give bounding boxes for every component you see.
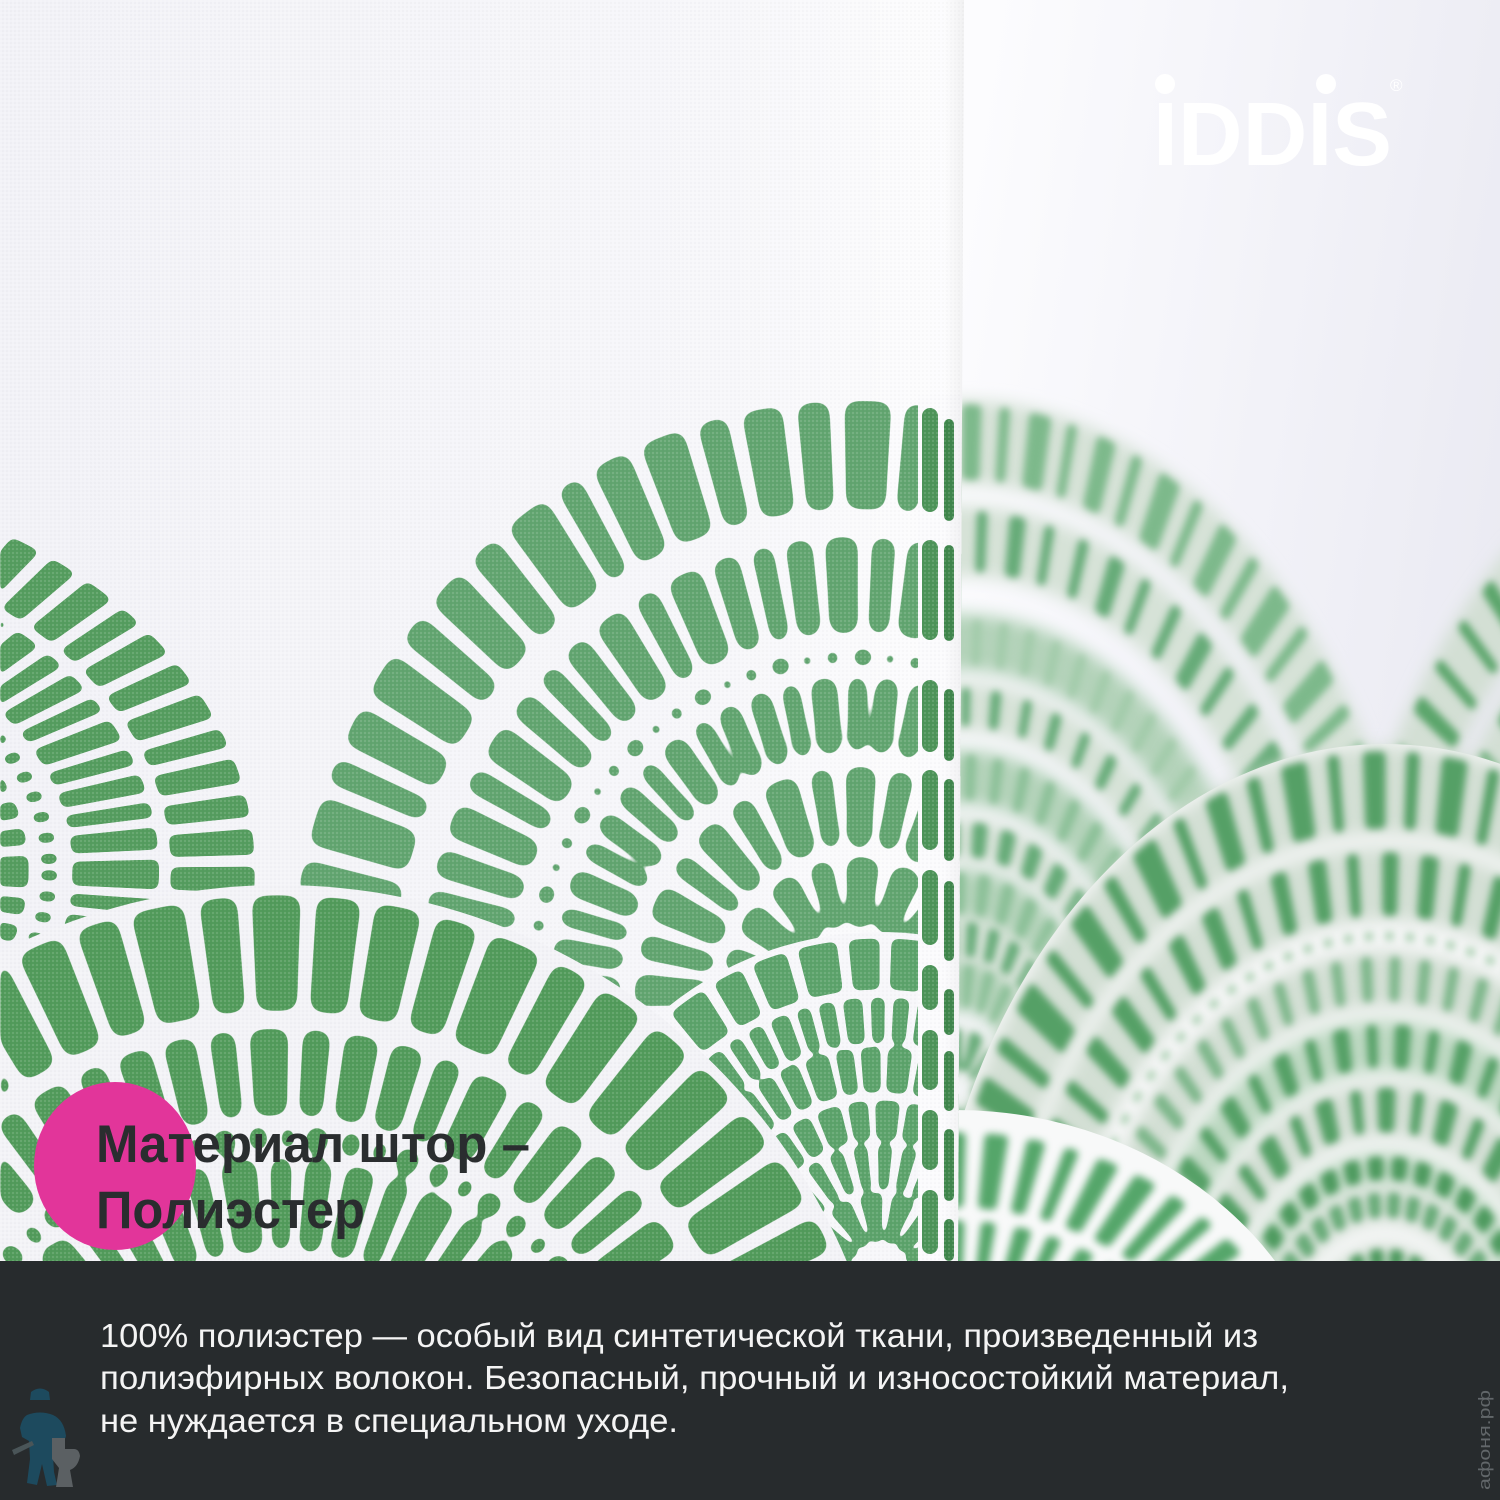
logo: IDDIS: IDDIS [1153,85,1392,185]
fan: lower left pattern [0,885,847,1261]
title: Полиэстер [96,1181,365,1240]
fan: blurred top right pattern [1390,553,1500,764]
logo: IDDIS: ® [1390,76,1403,95]
description text: не нуждается в специальном уходе. [100,1402,678,1439]
fan: main central pattern [300,400,962,1194]
title: Материал штор – [96,1115,530,1174]
description text: полиэфирных волокон. Безопасный, прочный и износостойкий материал, [100,1359,1289,1396]
description text [100,1317,1289,1439]
panel: dark description band [0,1261,1500,1500]
panel: sharp curtain fold with pattern (left) [0,0,964,1261]
compressed petals at the curtain fold [918,405,962,1261]
fan: left partial pattern [0,539,255,941]
pink accent circle [34,1082,196,1250]
description text: 100% полиэстер — особый вид синтетической ткани, произведенный из [100,1317,1258,1354]
fan: blurred large lower right pattern [962,742,1500,1261]
fan: blurred top left pattern [959,394,1370,1110]
icon: plumber with toilet watermark [12,1388,80,1487]
watermark: afonya.rf: афоня.рф [1475,1390,1494,1490]
fan: small lower right pattern [662,932,960,1261]
panel: blurred curtain background (right) [958,0,1500,1261]
title [96,1115,530,1240]
fan: blurred bottom left pattern [958,1110,1275,1261]
